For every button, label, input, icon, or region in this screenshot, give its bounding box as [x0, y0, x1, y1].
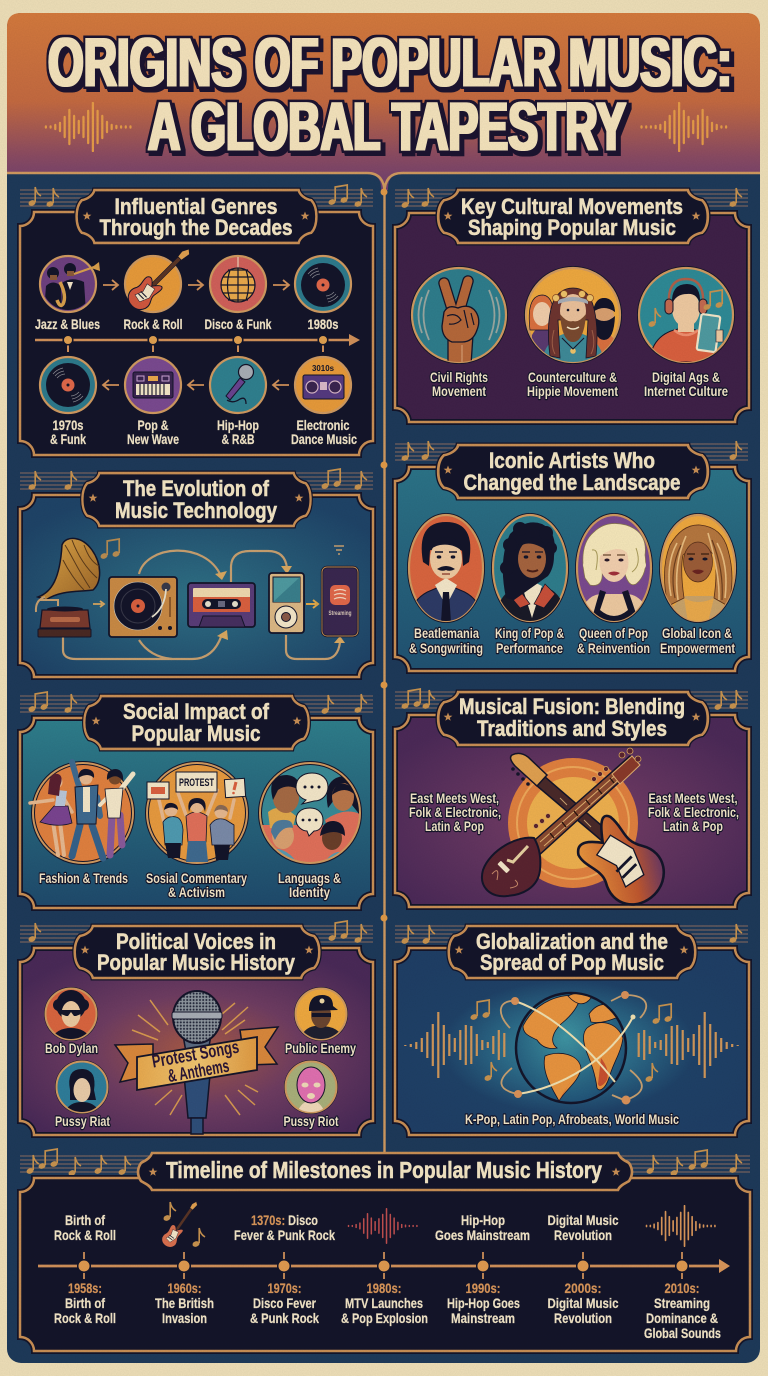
heading: globalization: Spread of Pop Music — [480, 950, 664, 975]
heading: social impact — [84, 696, 309, 749]
icon: portrait King of Pop — [491, 513, 569, 625]
icon: header sound wave right — [642, 103, 726, 151]
heading: political voices: Popular Music History — [97, 950, 296, 975]
icon: portrait Global Icon — [659, 513, 737, 625]
label: above 2000s — [548, 1212, 619, 1243]
label: Languages & Identity: Identity — [289, 884, 330, 900]
label: Jazz & Blues: Jazz & Blues — [35, 316, 100, 332]
heading: influential genres: Through the Decades — [100, 215, 292, 240]
label: above 1970s: 1370s: Disco — [251, 1212, 318, 1228]
label: Digital Age & Internet Culture: Digital Ags & — [652, 369, 720, 385]
heading: globalization — [449, 926, 695, 978]
label: 1970s: 1970s: — [268, 1280, 302, 1296]
icon: peace hand — [410, 266, 508, 365]
label: Hip-Hop & R&B — [217, 417, 259, 447]
panel: music technology — [20, 469, 373, 677]
timeline: genres — [35, 334, 360, 352]
icon: header sound wave left — [46, 103, 130, 151]
banner: Protest Songs & Anthems: Protest Songs — [150, 1037, 241, 1072]
connector arrows — [63, 551, 345, 659]
icon: microphone — [210, 357, 266, 413]
label: Counterculture & Hippie Movement — [527, 369, 618, 399]
icon: mp3 player — [269, 573, 304, 633]
icon: hippies — [524, 266, 622, 365]
panel: musical fusion — [395, 689, 749, 916]
label: Queen of Pop & Reinvention — [577, 625, 650, 656]
label: Civil Rights Movement: Civil Rights — [430, 369, 488, 385]
arrow: player to phone — [306, 600, 318, 608]
label: above 1950s: Birth of — [65, 1212, 105, 1228]
label: Global Icon & Empowerment: Empowerment — [660, 640, 735, 656]
label: Pop & New Wave — [127, 417, 179, 447]
title — [48, 24, 732, 165]
label: Civil Rights Movement: Movement — [432, 383, 486, 399]
icon: protest crowd — [147, 763, 247, 863]
icon: digital listener — [637, 266, 735, 364]
label: above 1990s — [435, 1212, 530, 1243]
label: 1990s: 1990s: — [466, 1280, 500, 1296]
label: world genres: K-Pop, Latin Pop, Afrobeats, World Music — [465, 1111, 679, 1127]
label: Queen of Pop & Reinvention: Queen of Pop — [579, 625, 648, 641]
icon: portrait Beatles songwriter — [407, 513, 485, 625]
label: Fashion & Trends: Fashion & Trends — [39, 870, 128, 886]
label: 1990s: Hip-Hop Goes — [447, 1295, 520, 1311]
label: Global Icon & Empowerment — [660, 625, 735, 656]
label: left fusion list — [409, 790, 501, 834]
heading: musical fusion — [438, 692, 708, 745]
icon: smartphone: Streaming — [328, 611, 352, 617]
icon: orbit lines — [501, 991, 646, 1104]
label: Hip-Hop & R&B: & R&B — [222, 431, 254, 447]
label: 2000s: 2000s: — [564, 1280, 602, 1296]
panel: social impact — [20, 692, 373, 908]
label: Global Icon & Empowerment: Global Icon & — [662, 625, 732, 641]
label: right fusion list — [648, 790, 739, 834]
label: Public Enemy: Public Enemy — [285, 1040, 356, 1056]
heading: globalization: Globalization and the — [476, 929, 668, 954]
label: above 2000s: Revolution — [554, 1227, 612, 1243]
icon: vinyl 1980s — [295, 256, 351, 312]
label: King of Pop & Performance: King of Pop & — [495, 625, 564, 641]
label: 1980s: MTV Launches — [345, 1295, 423, 1311]
header band — [7, 13, 760, 190]
heading: influential genres — [77, 190, 316, 243]
icon: boombox: 3010s — [312, 364, 335, 373]
heading: music technology: The Evolution of — [123, 476, 270, 501]
icon: floating notes — [470, 1000, 672, 1083]
label: left fusion list: East Meets West, — [410, 790, 499, 806]
panel: cultural movements — [395, 188, 749, 422]
label: Counterculture & Hippie Movement: Counterculture & — [528, 369, 617, 385]
label: 1950s — [54, 1280, 116, 1326]
label: 2010s: Dominance & — [646, 1310, 718, 1326]
label: Social Commentary & Activism — [146, 870, 247, 900]
label: Bob Dylan: Bob Dylan — [45, 1040, 98, 1056]
label: 1980s: 1980s — [308, 316, 339, 332]
icon: keyboard synth — [125, 357, 181, 413]
icon: Bob Dylan portrait — [44, 987, 98, 1042]
label: Electronic Dance Music: Dance Music — [291, 431, 357, 447]
label: Social Commentary & Activism: & Activism — [168, 884, 225, 900]
icon: red sound wave — [349, 1209, 417, 1243]
label: 1960s: The British — [155, 1295, 214, 1311]
label: King of Pop & Performance: Performance — [496, 640, 563, 656]
label: 1950s: 1958s: — [68, 1280, 102, 1296]
label: Pussy Riat: Pussy Riat — [55, 1113, 110, 1129]
icon: sitar — [482, 748, 641, 896]
icon: Public Enemy portrait — [294, 987, 348, 1042]
icon: portrait Queen of Pop — [575, 513, 653, 625]
heading: political voices: Political Voices in — [116, 929, 276, 954]
label: 1960s: 1960s: — [168, 1280, 202, 1296]
icon: disco ball — [210, 256, 266, 312]
label: left fusion list: Latin & Pop — [425, 818, 484, 834]
label: 1980s — [341, 1280, 428, 1326]
icon: jazz and blues — [40, 256, 100, 312]
label: 1990s: Mainstream — [451, 1310, 515, 1326]
icon: sound wave right — [639, 1012, 738, 1078]
label: Digital Age & Internet Culture: Internet Culture — [644, 383, 728, 399]
panel: timeline of milestones — [20, 1149, 750, 1351]
label: Pop & New Wave: Pop & — [138, 417, 168, 433]
label: above 1990s: Hip-Hop — [461, 1212, 505, 1228]
icon: rock and roll — [124, 241, 197, 314]
heading: cultural movements: Key Cultural Movements — [461, 194, 683, 219]
label: Pop & New Wave: New Wave — [127, 431, 179, 447]
icon: small guitar with notes — [159, 1197, 205, 1250]
label: 1990s — [447, 1280, 520, 1326]
icon: cassette — [188, 583, 255, 627]
label: 1960s: Invasion — [162, 1310, 207, 1326]
icon: dancers, fashion — [30, 762, 133, 863]
label: Electronic Dance Music: Electronic — [296, 417, 350, 433]
label: right fusion list: Folk & Electronic, — [648, 804, 739, 820]
heading: cultural movements — [438, 190, 708, 243]
heading: influential genres: Influential Genres — [114, 194, 278, 219]
label: 1980s: 1980s: — [366, 1280, 402, 1296]
banner: Protest Songs & Anthems: & Anthems — [166, 1056, 231, 1086]
panel: political voices — [20, 921, 373, 1135]
label: 1970s: & Punk Rock — [250, 1310, 319, 1326]
label: 2010s — [644, 1280, 721, 1341]
label: Electronic Dance Music — [291, 417, 357, 447]
label: Beatlemania & Songwriting: Beatlemania — [414, 625, 479, 641]
label: Languages & Identity: Languags & — [278, 870, 341, 886]
heading: cultural movements: Shaping Popular Music — [468, 215, 676, 240]
icon: wifi signal — [334, 546, 344, 554]
label: Languages & Identity — [278, 870, 341, 900]
heading: iconic artists — [438, 445, 708, 498]
label: above 1970s — [234, 1212, 335, 1243]
label: Beatlemania & Songwriting — [409, 625, 483, 656]
heading: musical fusion: Musical Fusion: Blending — [459, 694, 685, 719]
icon: Pussy Riot portrait left — [55, 1060, 109, 1114]
label: above 1970s: Fever & Punk Rock — [234, 1227, 335, 1243]
label: 1950s: Rock & Roll — [54, 1310, 116, 1326]
label: Pussy Riot: Pussy Riot — [284, 1113, 339, 1129]
icon: crossed electric guitar — [511, 753, 676, 916]
label: above 2000s: Digital Music — [548, 1212, 619, 1228]
heading: music technology — [82, 473, 311, 526]
label: Counterculture & Hippie Movement: Hippie Movement — [527, 383, 618, 399]
label: Beatlemania & Songwriting: & Songwriting — [409, 640, 483, 656]
heading: timeline: Timeline of Milestones in Popular Music History — [166, 1157, 602, 1183]
icon: smartphone — [322, 567, 358, 636]
icon: vinyl 1970s — [40, 357, 96, 413]
heading: political voices — [75, 926, 319, 978]
icon: sound wave left — [405, 1012, 504, 1078]
icon: language speech bubbles — [255, 763, 365, 870]
label: 1970s: Disco Fever — [253, 1295, 316, 1311]
label: Hip-Hop & R&B: Hip-Hop — [217, 417, 259, 433]
label: 1950s: Birth of — [65, 1295, 105, 1311]
label: Digital Age & Internet Culture — [644, 369, 728, 399]
heading: timeline — [138, 1153, 632, 1190]
icon: microphone with rays — [132, 991, 258, 1134]
body panels backgrounds with centre divider — [7, 173, 760, 1152]
label: Civil Rights Movement — [430, 369, 488, 399]
label: 1970s & Funk: 1970s — [52, 417, 84, 433]
label: 2010s: Streaming — [654, 1295, 710, 1311]
label: 2010s: 2010s: — [664, 1280, 700, 1296]
icon: protest crowd: PROTEST — [179, 777, 214, 789]
label: Rock & Roll: Rock & Roll — [124, 316, 182, 332]
label: Disco & Funk: Disco & Funk — [204, 316, 272, 332]
label: 1970s & Funk — [50, 417, 86, 447]
label: above 1950s: Rock & Roll — [54, 1227, 116, 1243]
icon: boombox — [295, 357, 351, 413]
label: 2000s: Revolution — [554, 1310, 612, 1326]
arrows: top row — [103, 280, 289, 290]
heading: musical fusion: Traditions and Styles — [477, 716, 667, 741]
icon: music note — [100, 539, 120, 560]
arrows: lower row — [103, 380, 289, 390]
icon: sun burst — [508, 758, 638, 888]
icon: Pussy Riot portrait right — [284, 1060, 338, 1114]
banner: Protest Songs & Anthems — [115, 1027, 278, 1090]
label: 1960s — [155, 1280, 214, 1326]
panel: iconic artists — [395, 441, 749, 671]
label: 2010s: Global Sounds — [644, 1325, 721, 1341]
label: right fusion list: East Meets West, — [648, 790, 738, 806]
label: Social Commentary & Activism: Sosial Commentary — [146, 870, 247, 886]
timeline axis with markers — [38, 1252, 730, 1279]
label: above 1950s — [54, 1212, 116, 1243]
heading: social impact: Popular Music — [132, 721, 260, 746]
label: 1970s — [250, 1280, 319, 1326]
label: right fusion list: Latin & Pop — [663, 818, 723, 834]
label: 2000s: Digital Music — [548, 1295, 619, 1311]
panel: globalization — [395, 924, 749, 1135]
icon: orange sound wave — [647, 1206, 715, 1246]
heading: social impact: Social Impact of — [123, 699, 270, 724]
icon: globe — [516, 993, 626, 1103]
heading: music technology: Music Technology — [115, 498, 278, 523]
panel: influential genres — [20, 185, 373, 455]
heading: iconic artists: Changed the Landscape — [464, 470, 680, 495]
label: above 1990s: Goes Mainstream — [435, 1227, 530, 1243]
label: King of Pop & Performance — [495, 625, 564, 656]
arrow: gramophone to turntable — [93, 601, 104, 607]
label: 2000s — [548, 1280, 619, 1326]
icon: gramophone — [36, 538, 100, 637]
heading: iconic artists: Iconic Artists Who — [489, 448, 655, 473]
label: 1980s: & Pop Explosion — [341, 1310, 428, 1326]
label: left fusion list: Folk & Electronic, — [409, 804, 501, 820]
label: 1970s & Funk: & Funk — [50, 431, 86, 447]
icon: turntable — [109, 577, 177, 637]
label: Queen of Pop & Reinvention: & Reinvention — [577, 640, 650, 656]
